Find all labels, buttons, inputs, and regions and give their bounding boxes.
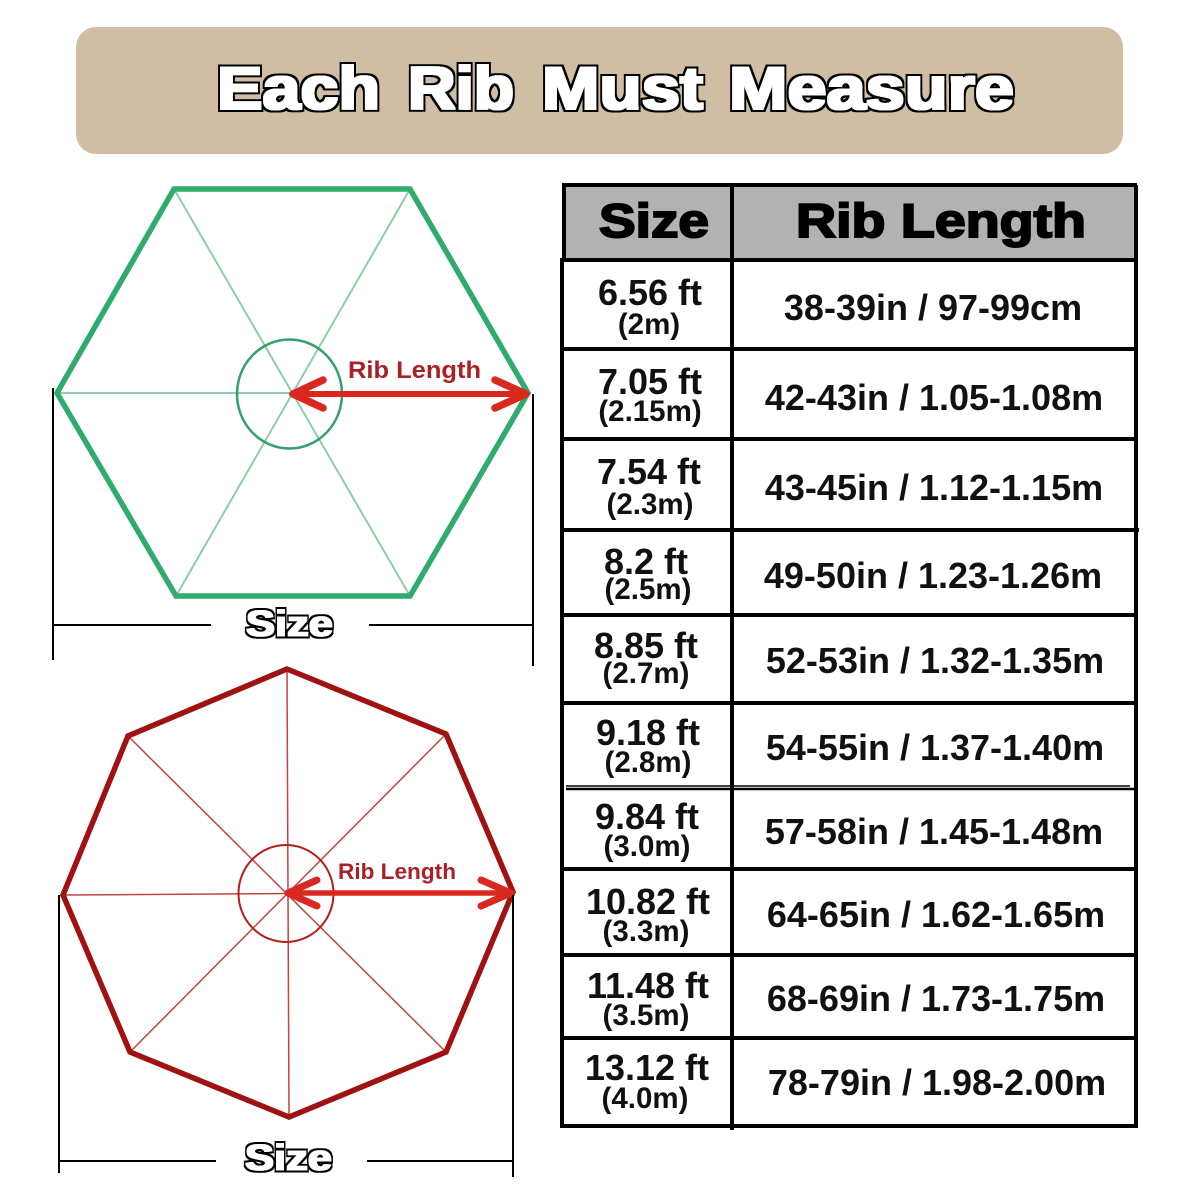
- row 2: [598, 361, 1103, 428]
- row 2: 7.05 ft: [598, 361, 702, 402]
- table header: Size: [599, 194, 709, 247]
- row 5: (2.7m): [603, 657, 689, 690]
- size label: Size: [246, 603, 333, 644]
- row 7: 57-58in / 1.45-1.48m: [765, 811, 1103, 852]
- row 6: 54-55in / 1.37-1.40m: [766, 727, 1104, 768]
- table header: Rib Length: [796, 194, 1086, 247]
- row 8: 10.82 ft: [586, 881, 710, 922]
- octagon hub circle: [238, 845, 334, 942]
- size dimension: [59, 895, 513, 1177]
- row 3: [597, 451, 1103, 521]
- row 4: 49-50in / 1.23-1.26m: [764, 555, 1102, 596]
- row 8: 64-65in / 1.62-1.65m: [767, 894, 1105, 935]
- hexagon hub circle: [237, 340, 342, 448]
- row 10: 13.12 ft: [585, 1047, 709, 1088]
- row 5: 52-53in / 1.32-1.35m: [766, 640, 1104, 681]
- row 10: [585, 1047, 1106, 1115]
- size label: Size: [245, 1137, 332, 1178]
- row 3: (2.3m): [607, 488, 693, 521]
- row 5: [594, 625, 1104, 690]
- row 2: 42-43in / 1.05-1.08m: [765, 377, 1103, 418]
- row 5: 8.85 ft: [594, 625, 698, 666]
- rib length label: Rib Length: [338, 859, 456, 884]
- row 9: 11.48 ft: [587, 965, 709, 1006]
- rib length label: Rib Length: [348, 357, 481, 384]
- row 1: [598, 272, 1082, 341]
- hexagon outline: [57, 189, 528, 596]
- row 3: 7.54 ft: [597, 451, 701, 492]
- row 2: (2.15m): [598, 395, 702, 428]
- row 7: (3.0m): [604, 830, 690, 863]
- row 4: (2.5m): [605, 573, 691, 606]
- title banner: [76, 27, 1123, 154]
- row 3: 43-45in / 1.12-1.15m: [765, 467, 1103, 508]
- row 9: 68-69in / 1.73-1.75m: [767, 978, 1105, 1019]
- rib length arrow: [292, 380, 526, 408]
- row 1: (2m): [618, 308, 680, 341]
- table header: [564, 186, 1136, 259]
- rib length arrow: [288, 880, 511, 906]
- row 9: (3.5m): [603, 999, 689, 1032]
- title: Each: [217, 55, 380, 122]
- hexagon spokes: [57, 189, 528, 596]
- size table: [560, 185, 1139, 1130]
- octagon outline: [63, 669, 513, 1117]
- row 6: (2.8m): [605, 746, 691, 779]
- row 9: [587, 965, 1105, 1032]
- row 6: [596, 712, 1104, 779]
- row 4: [604, 541, 1102, 606]
- row 1: 38-39in / 97-99cm: [784, 287, 1082, 328]
- size dimension: [53, 388, 533, 666]
- octagon spokes: [63, 669, 513, 1117]
- title: Measure: [729, 55, 1014, 122]
- row 10: 78-79in / 1.98-2.00m: [768, 1062, 1106, 1103]
- row 6: 9.18 ft: [596, 712, 700, 753]
- row 10: (4.0m): [602, 1082, 688, 1115]
- row 8: [586, 881, 1105, 948]
- title: Must: [542, 55, 703, 122]
- hexagon diagram: [53, 189, 533, 666]
- title: Rib: [408, 55, 514, 122]
- row 7: [595, 796, 1103, 863]
- octagon diagram: [59, 669, 513, 1178]
- table grid: [560, 185, 1139, 1130]
- row 8: (3.3m): [603, 915, 689, 948]
- row 1: 6.56 ft: [598, 272, 702, 313]
- row 7: 9.84 ft: [595, 796, 699, 837]
- row 4: 8.2 ft: [604, 541, 688, 582]
